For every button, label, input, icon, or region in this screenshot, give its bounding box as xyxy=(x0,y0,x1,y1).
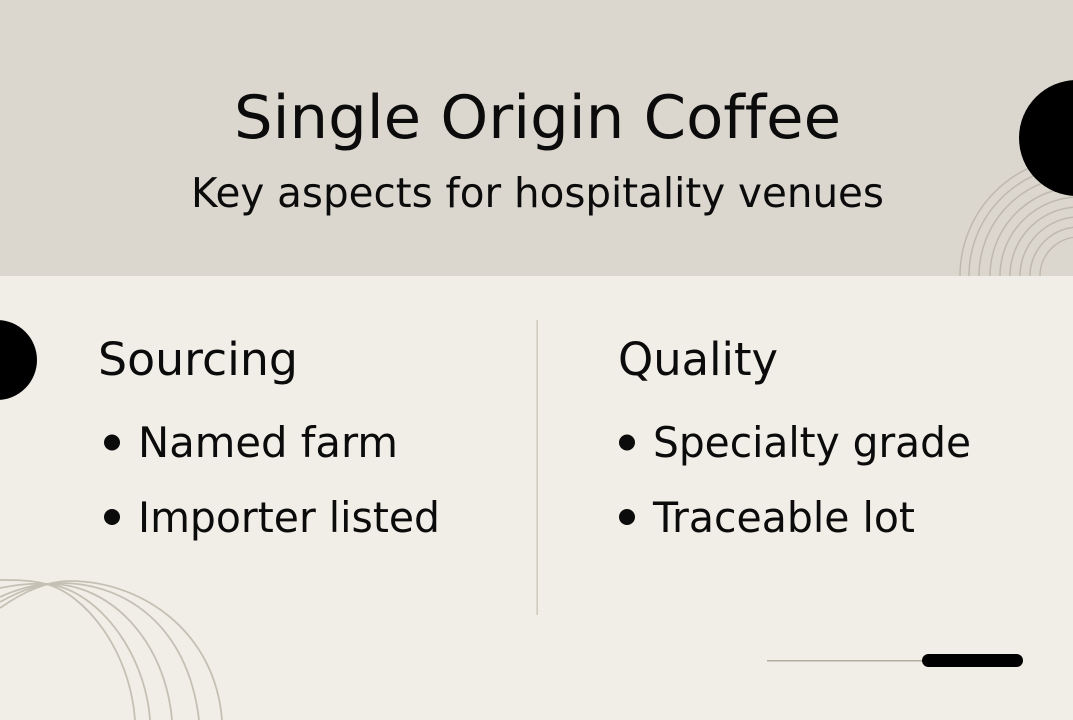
title: Single Origin Coffee xyxy=(234,83,841,153)
cover strip below header arcs xyxy=(940,276,1073,400)
heading: quality: Quality xyxy=(618,333,778,386)
panel: header band xyxy=(0,0,1073,400)
list item: importer listed: Importer listed xyxy=(138,493,440,542)
decorative concentric arcs, top right xyxy=(960,157,1073,395)
list item: specialty grade: Specialty grade xyxy=(653,418,971,467)
decorative overlapping arcs, bottom left xyxy=(0,580,222,720)
panel: quality column xyxy=(618,333,971,542)
list item: traceable lot: Traceable lot xyxy=(652,493,915,542)
heading: sourcing: Sourcing xyxy=(98,333,298,386)
footer accent: line and pill xyxy=(767,654,1023,667)
icon: black circle, top right xyxy=(1019,80,1073,196)
panel: sourcing column xyxy=(98,333,440,542)
panel: body background xyxy=(0,276,1073,720)
column divider xyxy=(536,320,538,615)
subtitle: Key aspects for hospitality venues xyxy=(191,169,884,217)
icon: black circle, left edge xyxy=(0,320,37,400)
list item: named farm: Named farm xyxy=(138,418,398,467)
